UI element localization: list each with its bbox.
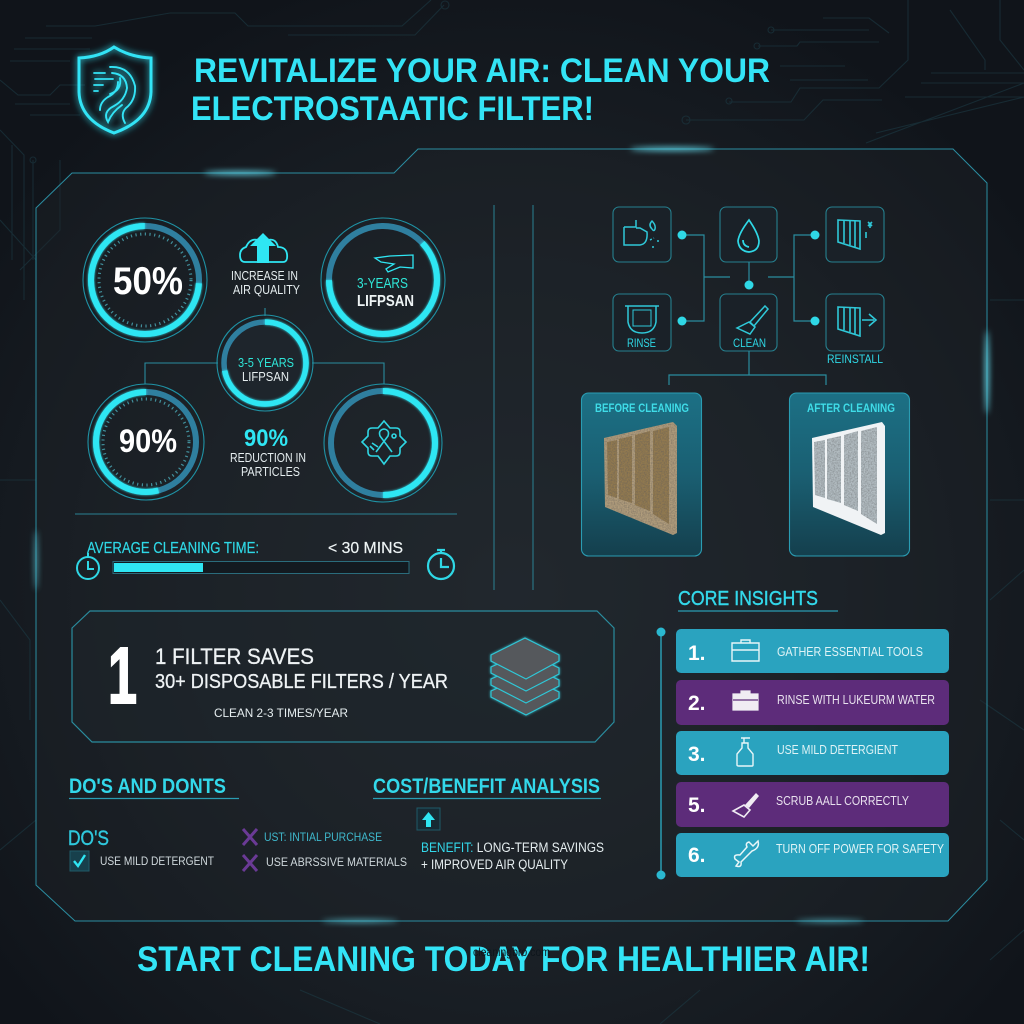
insight row 2 (676, 680, 949, 725)
icon: reinstall filter with arrow (827, 307, 884, 366)
stat ring: 50%: 50% (113, 260, 183, 303)
insight row 2: 2. (688, 692, 706, 715)
icon: shield logo (79, 47, 151, 133)
stat ring: 3-5 years lifespan (217, 315, 313, 411)
insight row 3 (676, 731, 949, 775)
stat label: increase in air quality: AIR QUALITY (233, 282, 300, 297)
stat ring: 3-years lifespan: 3-YEARS (357, 275, 408, 292)
insight row 5 (676, 833, 949, 877)
insight row 5: 6. (688, 844, 706, 867)
connector lines between rings (145, 308, 384, 384)
stat ring: 90% (88, 384, 204, 500)
stat label: 90% reduction in particles (230, 425, 306, 479)
icon: stopwatch left (77, 553, 99, 579)
stat ring: 50% (83, 218, 207, 342)
icon: reinstall filter with arrow: REINSTALL (827, 354, 884, 366)
process step boxes (613, 207, 884, 351)
callout: filter savings (72, 611, 614, 742)
stat ring: particle icon (324, 384, 442, 502)
watermark: cleaningbro.com (473, 945, 550, 959)
stat label: increase in air quality (231, 268, 300, 297)
insight row 3: 3. (688, 743, 706, 766)
icon: benefit up arrow (417, 808, 440, 830)
callout: filter savings: 1 (108, 631, 137, 720)
callout: filter savings: 1 FILTER SAVES (155, 644, 314, 669)
callout: filter savings: CLEAN 2-3 TIMES/YEAR (214, 706, 348, 720)
insights timeline (656, 628, 666, 880)
title: ELECTROSTAATIC FILTER! (191, 90, 594, 128)
panel: after cleaning: AFTER CLEANING (807, 401, 895, 415)
icon: cloud with up arrow (240, 233, 287, 263)
stat label: 90% reduction in particles: 90% (244, 425, 288, 452)
icon: stopwatch right (428, 550, 454, 579)
panel: before cleaning (582, 393, 702, 556)
panel: before cleaning: BEFORE CLEANING (595, 401, 689, 415)
stat label: increase in air quality: INCREASE IN (231, 268, 298, 283)
benefit text: BENEFIT: LONG-TERM SAVINGS (421, 840, 604, 855)
stat label: 90% reduction in particles: PARTICLES (241, 464, 300, 479)
stat ring: 3-5 years lifespan: LIFPSAN (242, 369, 289, 384)
process flow connectors (669, 230, 826, 385)
average cleaning time bar: AVERAGE CLEANING TIME: (87, 540, 259, 557)
benefit text (421, 840, 604, 872)
panel: after cleaning (790, 393, 910, 556)
icon: rinse basin with label (625, 306, 659, 350)
main panel frame (34, 147, 989, 922)
insight row 5: TURN OFF POWER FOR SAFETY (776, 842, 945, 856)
do's list: USE MILD DETERGENT (100, 854, 215, 868)
insight row 1: 1. (688, 642, 706, 665)
insight row 4: SCRUB AALL CORRECTLY (776, 794, 910, 808)
stat ring: 90%: 90% (119, 423, 177, 459)
stat ring: 3-5 years lifespan: 3-5 YEARS (238, 355, 294, 370)
insight row 1 (676, 629, 949, 673)
benefit text: + IMPROVED AIR QUALITY (421, 857, 568, 872)
do's list (68, 827, 215, 871)
divider lines (75, 205, 533, 590)
title: REVITALIZE YOUR AIR: CLEAN YOUR (194, 52, 770, 90)
heading: cost/benefit analysis: COST/BENEFIT ANALYSIS (373, 775, 600, 798)
heading: do's and don'ts: DO'S AND DONTS (69, 775, 226, 798)
icon: brush with label (733, 306, 768, 350)
heading: core insights: CORE INSIGHTS (678, 587, 818, 610)
insight row 1: GATHER ESSENTIAL TOOLS (777, 645, 923, 659)
title (191, 52, 770, 128)
insight row 3: USE MILD DETERGIENT (777, 743, 898, 757)
stat ring: 3-years lifespan (321, 218, 445, 342)
icon: filter with sparkle (838, 220, 872, 249)
insight row 4: 5. (688, 794, 706, 817)
icon: hand washing (624, 220, 658, 247)
don'ts list: UST: INTIAL PURCHASE (264, 830, 382, 844)
insight row 4 (676, 782, 949, 827)
insight row 2: RINSE WITH LUKEURM WATER (777, 693, 935, 707)
icon: water drop (738, 220, 759, 252)
average cleaning time bar: < 30 MINS (328, 540, 403, 557)
icon: brush with label: CLEAN (733, 338, 766, 350)
icon: rinse basin with label: RINSE (627, 338, 656, 350)
don'ts list (243, 829, 407, 871)
stat label: 90% reduction in particles: REDUCTION IN (230, 450, 306, 465)
callout: filter savings: 30+ DISPOSABLE FILTERS / YEAR (155, 671, 448, 693)
stat ring: 3-years lifespan: LIFPSAN (357, 293, 414, 310)
don'ts list: USE ABRSSIVE MATERIALS (266, 855, 407, 869)
footer call to action: START CLEANING TODAY FOR HEALTHIER AIR! (137, 940, 870, 979)
icon: stacked filters (491, 638, 559, 715)
do's list: DO'S (68, 827, 109, 850)
average cleaning time bar (87, 540, 409, 574)
